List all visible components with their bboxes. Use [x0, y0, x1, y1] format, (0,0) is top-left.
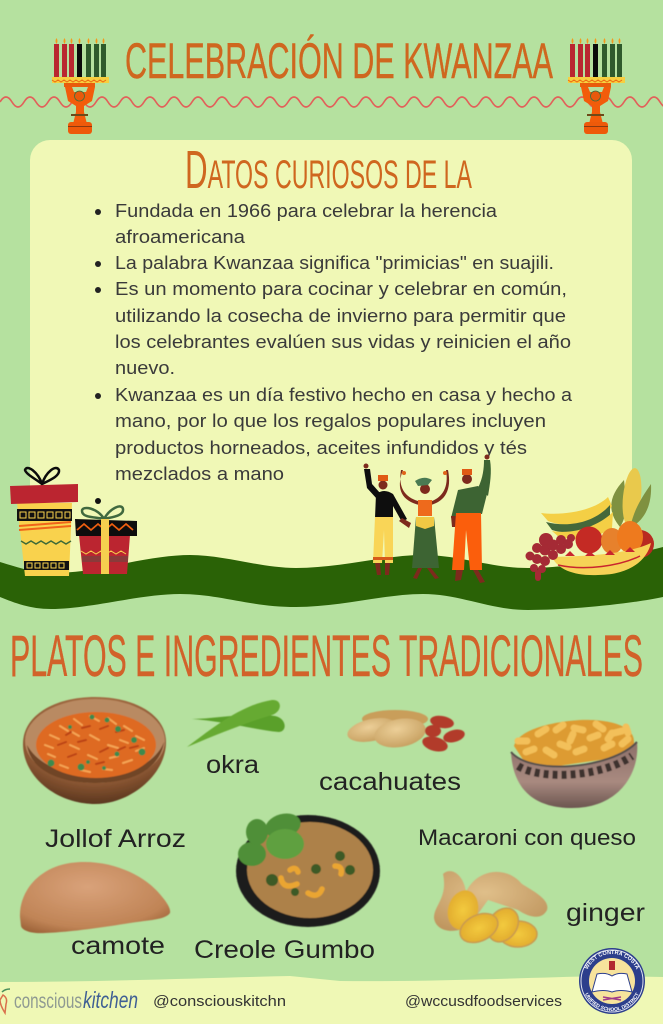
bullet list: facts: Fundada en 1966 para celebrar la herencia [115, 201, 498, 221]
bullet list: facts: Es un momento para cocinar y celebrar en común, [115, 279, 567, 299]
footer band [0, 976, 663, 1024]
icon: left kinara [52, 38, 109, 134]
logo: conscious kitchen: conscious [14, 990, 82, 1013]
label: ginger: ginger [566, 899, 645, 927]
food: peanuts [345, 710, 466, 754]
illustration: fruit bowl [526, 467, 654, 581]
panel heading: DATOS CURIOSOS DE LA [185, 140, 472, 200]
icon: small gift [75, 498, 137, 574]
wavy decorative line [0, 97, 663, 107]
bullet list: facts [95, 201, 573, 484]
social handle: conscious kitchen: @consciouskitchn [153, 993, 286, 1010]
bullet list: facts: mezclados a mano [115, 464, 284, 484]
icon: tall gift [10, 468, 78, 576]
food: macaroni bowl [511, 720, 637, 808]
icon: right kinara [568, 38, 625, 134]
bananas [541, 497, 613, 540]
bullet list: facts: productos horneados, aceites infundidos y tés [115, 438, 527, 458]
food: sweet potato [20, 862, 170, 933]
label: cacahuates: cacahuates [319, 768, 461, 796]
bullet list: facts: nuevo. [115, 358, 175, 378]
bullet list: facts: mano, por lo que los regalos populares incluyen [115, 411, 546, 431]
social handle: food services: @wccusdfoodservices [405, 993, 562, 1010]
fruits [576, 521, 654, 558]
ground band [0, 547, 663, 610]
logo: school district seal: WEST CONTRA COSTA [584, 950, 639, 970]
grapes [526, 533, 575, 581]
person: right in orange trousers [451, 454, 491, 583]
label: camote: camote [71, 932, 165, 960]
bullet list: facts: afroamericana [115, 227, 246, 247]
food: creole gumbo [236, 810, 380, 927]
bullet list: facts: Kwanzaa es un día festivo hecho en casa y hecho a [115, 385, 573, 405]
label: jollof arroz: Jollof Arroz [45, 825, 186, 853]
label: creole gumbo: Creole Gumbo [194, 936, 375, 964]
logo: conscious kitchen [0, 987, 138, 1013]
logo: school district seal [579, 948, 645, 1014]
bullet list: facts: La palabra Kwanzaa significa "primicias" en suajili. [115, 253, 554, 273]
logo: conscious kitchen: kitchen [83, 987, 138, 1013]
bullet list: facts: los celebrantes evalúen sus vidas y reinicien el año [115, 332, 571, 352]
label: okra: okra [206, 751, 259, 779]
panel: datos curiosos [30, 140, 632, 580]
bowl [552, 543, 651, 575]
food: okra [187, 700, 285, 747]
corn and leaves [611, 467, 651, 528]
bullet list: facts: utilizando la cosecha de invierno para permitir que [115, 306, 566, 326]
label: macaroni con queso: Macaroni con queso [418, 825, 636, 850]
illustration: three people celebrating [364, 454, 491, 583]
food: ginger [434, 871, 547, 948]
person: left in black shirt [364, 464, 411, 575]
logo: school district seal: UNIFIED SCHOOL DISTRICT [585, 992, 638, 1011]
person: middle in green skirt [400, 470, 449, 579]
food: jollof rice bowl [23, 697, 166, 804]
